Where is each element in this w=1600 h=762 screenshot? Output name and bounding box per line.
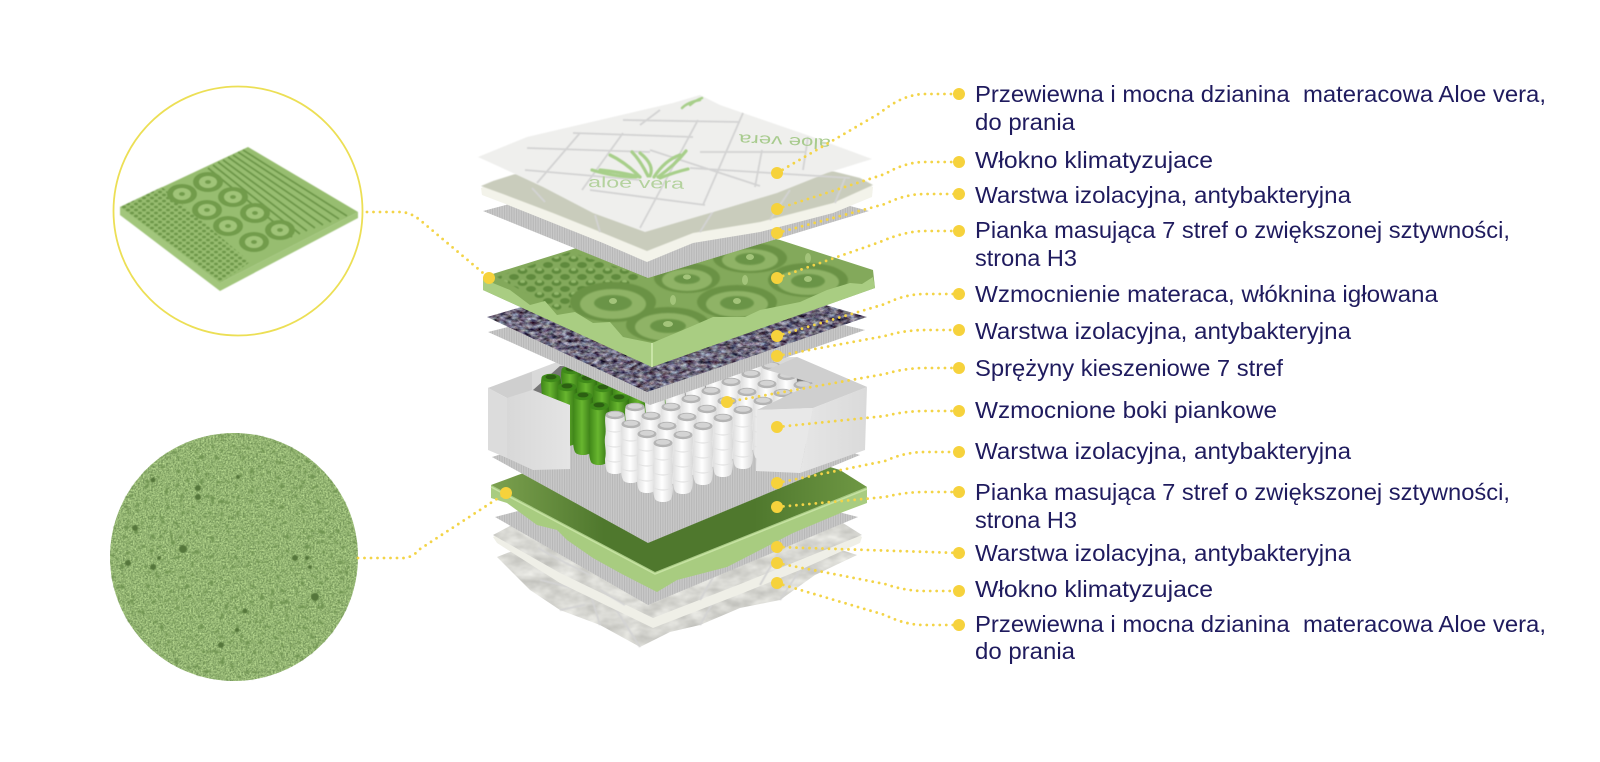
right foam side (756, 357, 867, 473)
aloe vera print front: aloe vera (588, 174, 685, 193)
panel: foam structure close-up circle (110, 433, 358, 681)
left foam side (488, 372, 570, 470)
label: massage foam bottom: Pianka masująca 7 stref o zwiększonej sztywności, (975, 479, 1510, 505)
label: foam sides: Wzmocnione boki piankowe (975, 397, 1277, 423)
aloe plant logo (592, 98, 702, 178)
massage rings (570, 243, 848, 343)
foam frame (488, 357, 867, 410)
label: climate fibre top: Włokno klimatyzujace (975, 147, 1213, 173)
layer: insulation mesh under springs (492, 400, 860, 543)
aloe vera print back: aloe vera (737, 130, 831, 152)
leader: foam close-up circle (358, 493, 506, 558)
layer: Aloe vera quilted cover (478, 95, 872, 232)
label: cover bottom: do prania (975, 638, 1075, 664)
layer: insulation mesh under felt (488, 285, 865, 405)
label: insulation lower: Warstwa izolacyjna, antybakteryjna (975, 438, 1351, 464)
layer: top climate fibre (481, 128, 873, 262)
label: insulation top: Warstwa izolacyjna, antybakteryjna (975, 182, 1351, 208)
layer: bottom green foam (491, 420, 867, 592)
layer: bottom knitted cover (497, 530, 857, 647)
panel: massage foam sample circle (114, 86, 362, 336)
egg-crate zone (497, 252, 647, 310)
layer: top green massage foam (483, 215, 875, 367)
label: cover top: do prania (975, 109, 1075, 135)
foam plate sample (120, 147, 358, 291)
label: massage foam top: Pianka masująca 7 stref o zwiększonej sztywności, (975, 217, 1510, 243)
leaders to labels (727, 94, 959, 625)
panel: pocket spring block (488, 349, 867, 502)
white springs (605, 353, 813, 502)
label: insulation: Warstwa izolacyjna, antybakteryjna (975, 318, 1351, 344)
layer: top insulation mesh (483, 160, 869, 278)
layer: bottom insulation mesh (495, 470, 858, 605)
label: massage foam bottom: strona H3 (975, 507, 1077, 533)
green springs (541, 349, 669, 465)
label: climate fibre bottom: Włokno klimatyzujace (975, 576, 1213, 602)
foam side walls (483, 277, 875, 367)
leader: massage foam circle (367, 212, 489, 278)
label: reinforcement: Wzmocnienie materaca, włóknina igłowana (975, 281, 1438, 307)
label: cover bottom: Przewiewna i mocna dzianina materacowa Aloe vera, (975, 611, 1546, 637)
leader end dots (483, 88, 965, 631)
layer: needled felt reinforcement (487, 262, 867, 392)
label: cover top: Przewiewna i mocna dzianina materacowa Aloe vera, (975, 81, 1546, 107)
label: insulation bottom: Warstwa izolacyjna, antybakteryjna (975, 540, 1351, 566)
label: massage foam top: strona H3 (975, 245, 1077, 271)
layer: bottom climate fibre (493, 523, 862, 628)
label: pocket springs: Sprężyny kieszeniowe 7 stref (975, 355, 1284, 381)
quilting stitches (525, 110, 850, 228)
